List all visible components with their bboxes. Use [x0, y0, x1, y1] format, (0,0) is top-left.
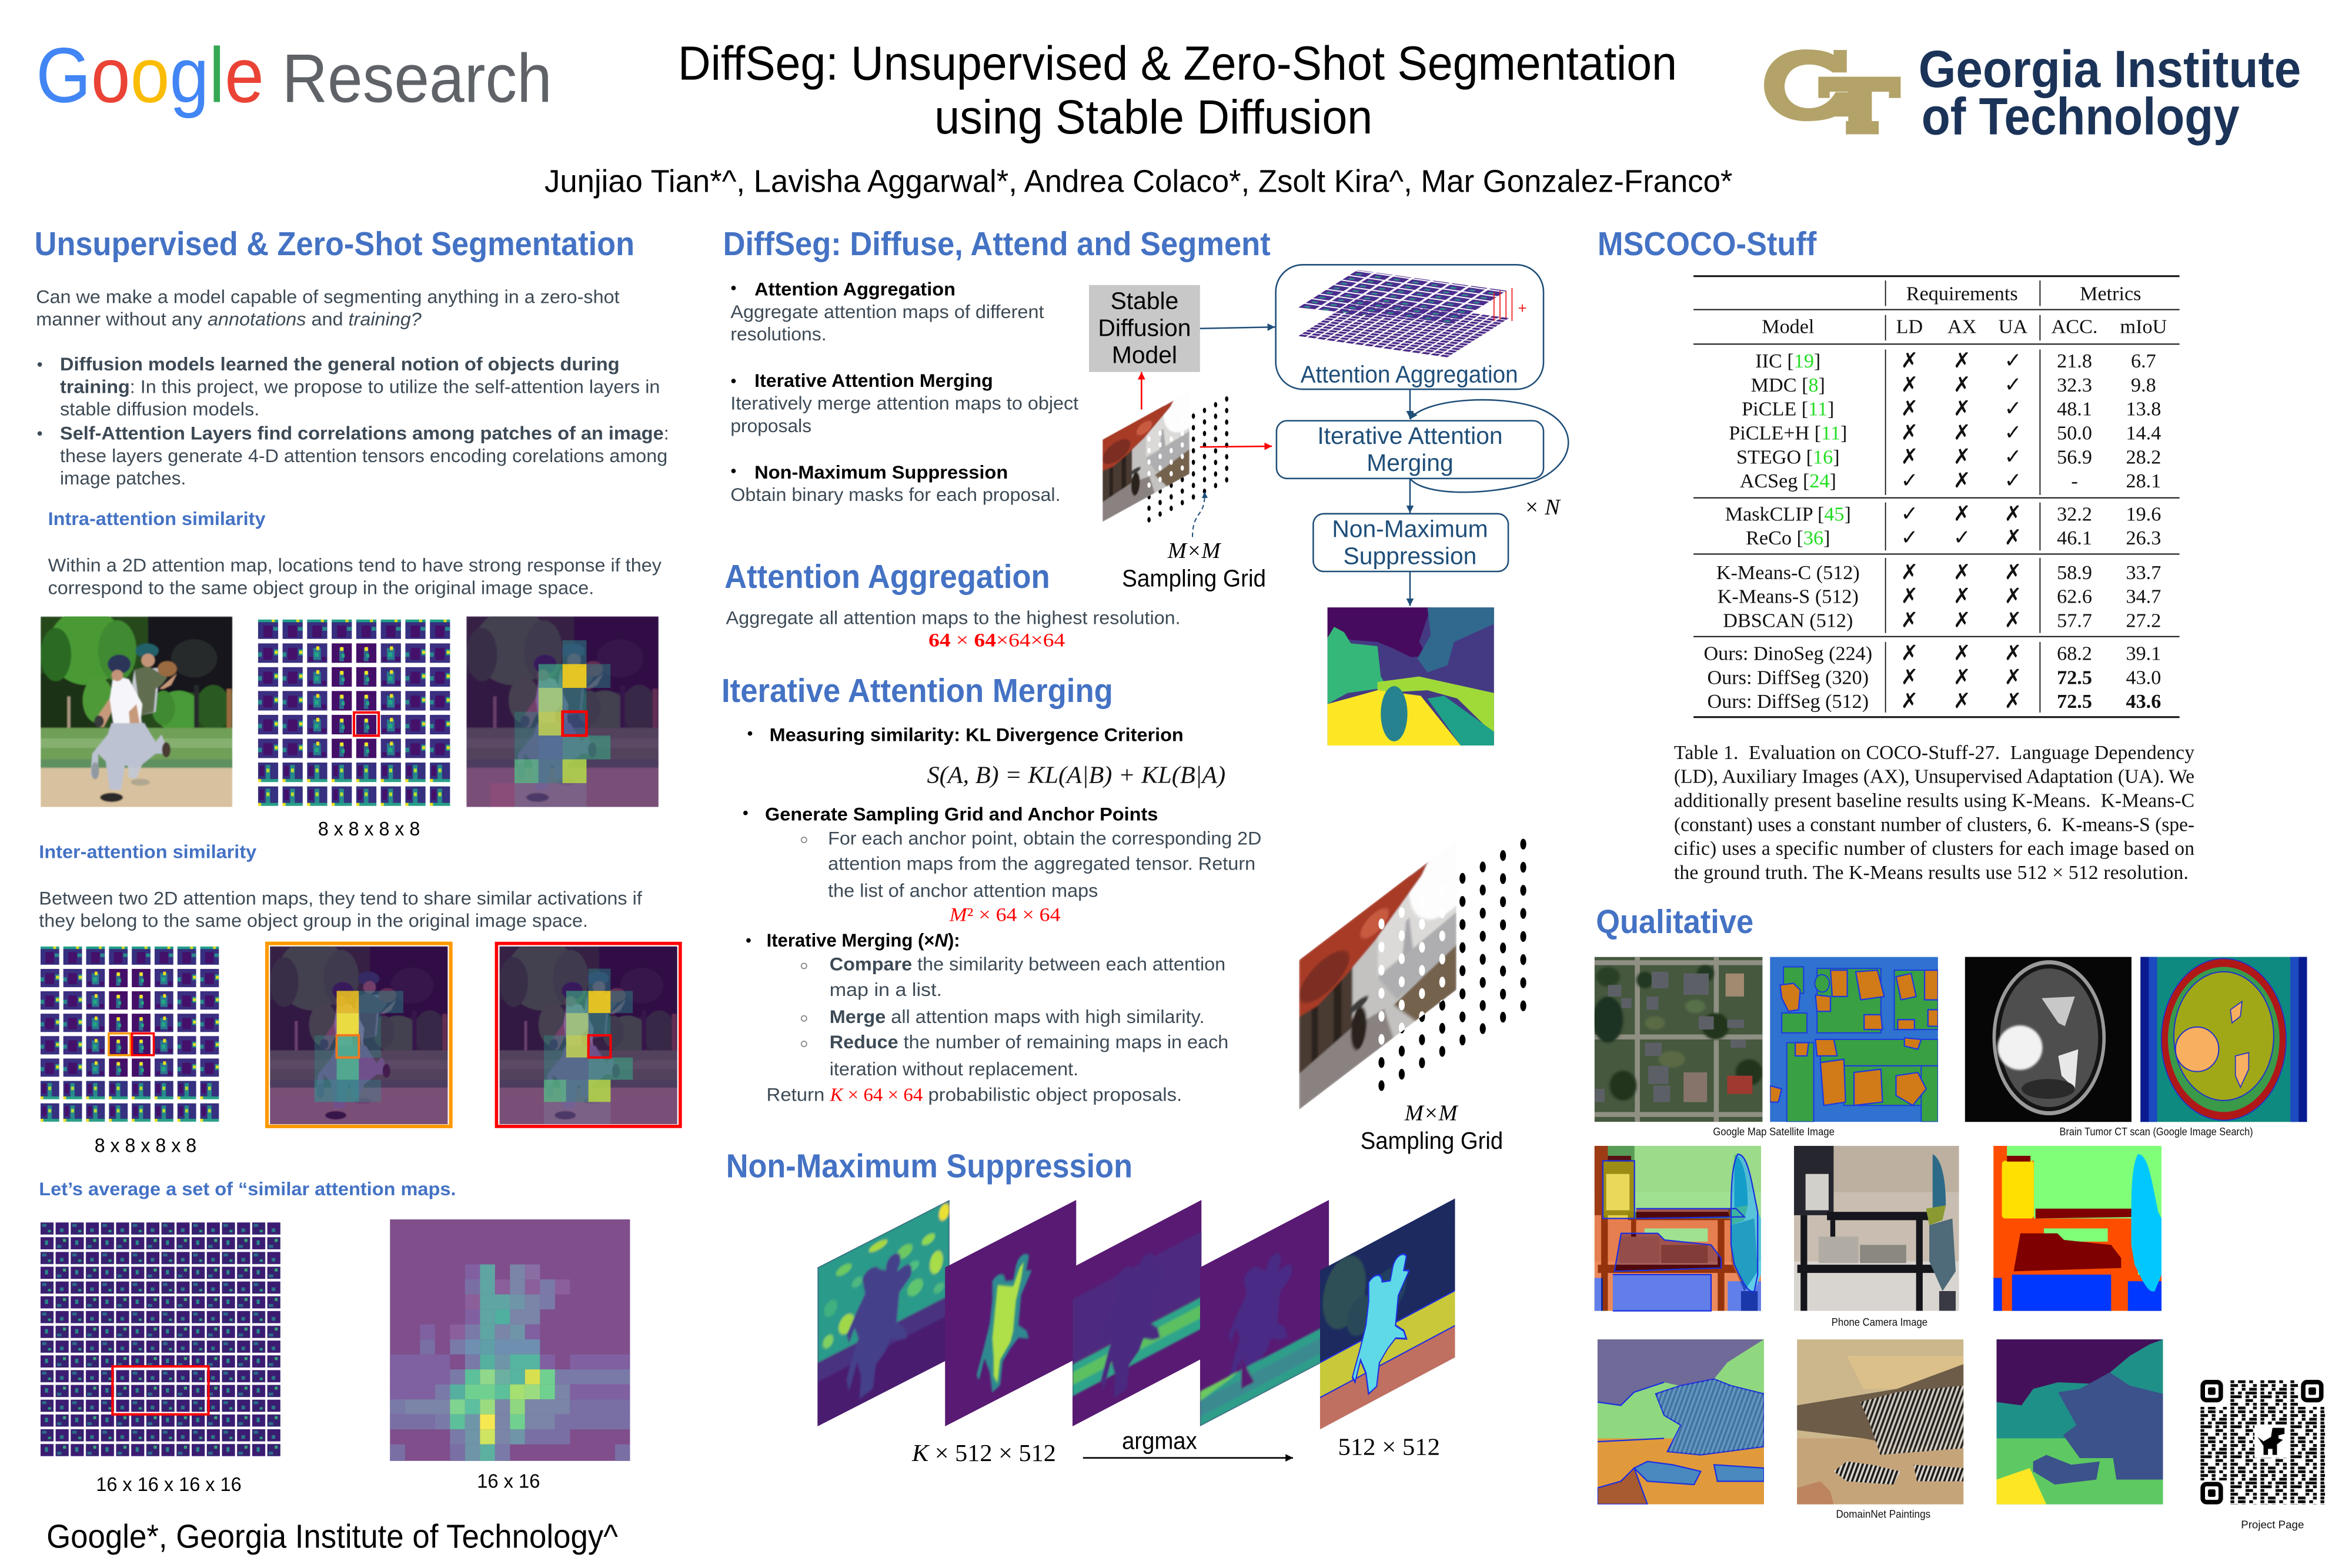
zebra segmentation flat: [1996, 1339, 2163, 1505]
results table: MDC [8]: [1751, 375, 1825, 396]
overview bullets: resolutions.: [730, 323, 827, 345]
results table: 19.6: [2126, 503, 2161, 525]
overlay: orange frame: [267, 940, 451, 1126]
box: Stable Diffusion Model: Stable: [1111, 287, 1178, 315]
results table: 28.2: [2126, 446, 2161, 468]
intra text: correspond to the same object group in the original image space.: [48, 577, 594, 598]
results table: ✗: [1953, 608, 1971, 632]
box: Attention Aggregation: +: [1518, 300, 1527, 317]
merging details: Measuring similarity: KL Divergence Criterion: [770, 724, 1184, 745]
results table: 68.2: [2057, 643, 2092, 665]
results table: 32.2: [2057, 503, 2092, 525]
overview bullets: proposals: [730, 415, 811, 436]
logo: Georgia Tech: [1764, 39, 2301, 145]
intro text: [36, 286, 620, 330]
results table: ✗: [2004, 526, 2022, 550]
arrow: aggregation to merging: [1409, 390, 1411, 419]
panel: left column: [35, 225, 680, 1555]
heading: Unsupervised & Zero-Shot Segmentation: Unsupervised & Zero-Shot Segmentation: [35, 225, 634, 262]
proposal map 4: [1200, 1200, 1329, 1426]
label: 8x8x8x8: 8 x 8 x 8 x 8: [318, 818, 420, 840]
table caption: the ground truth. The K-Means results use 512 × 512 resolution.: [1674, 862, 2189, 884]
results table: 9.8: [2131, 375, 2156, 396]
overview bullets: [730, 279, 1078, 505]
bullet list: [38, 353, 669, 489]
logo: Georgia Tech: Georgia Institute: [1919, 39, 2301, 98]
results table: ✓: [1900, 502, 1918, 526]
results table: Metrics: [2080, 283, 2141, 305]
results table: K-Means-C (512): [1716, 562, 1860, 584]
results table: 26.3: [2126, 527, 2161, 549]
results table: 14.4: [2126, 423, 2161, 444]
results table: 39.1: [2126, 643, 2161, 665]
merging details: Merge all attention maps with high similarity.: [830, 1006, 1204, 1027]
large sampling grid on image: [1299, 838, 1526, 1110]
results table: ✓: [1900, 526, 1918, 550]
box: Attention Aggregation: [1276, 265, 1544, 389]
logo: Google Research: [36, 32, 552, 119]
results table: 72.5: [2057, 691, 2092, 713]
label: 16x16x16x16: 16 x 16 x 16 x 16: [96, 1474, 242, 1496]
brain scan: [1965, 957, 2132, 1122]
flow diagram: [1089, 265, 1568, 745]
averaged heatmap 16x16: [390, 1219, 630, 1461]
heading: Iterative Attention Merging: Iterative Attention Merging: [721, 672, 1113, 709]
attention grid 16x16: [41, 1222, 282, 1458]
box: Iterative Attention Merging: [1277, 421, 1544, 479]
label: times N: × N: [1524, 495, 1561, 520]
results table: 56.9: [2057, 446, 2092, 468]
box: Iterative Attention Merging: Merging: [1367, 449, 1454, 476]
results table: ACC.: [2052, 316, 2097, 337]
results table: STEGO [16]: [1736, 446, 1840, 468]
heading: DiffSeg: DiffSeg: Diffuse, Attend and Segment: [723, 225, 1271, 262]
label: 512×512: 512 × 512: [1338, 1434, 1440, 1460]
results table: mIoU: [2120, 316, 2167, 337]
results table: 57.7: [2057, 610, 2092, 631]
overview bullets: Obtain binary masks for each proposal.: [730, 484, 1061, 505]
results table: 46.1: [2057, 527, 2092, 549]
results table: Requirements: [1906, 283, 2018, 305]
results table: ✓: [2004, 421, 2022, 445]
results table: ✓: [1900, 469, 1918, 493]
results table: 62.6: [2057, 586, 2092, 608]
arrow: grid to merging: [1200, 446, 1272, 447]
results table: ✗: [1900, 397, 1918, 421]
heading: Attention Aggregation: Attention Aggregation: [724, 558, 1050, 595]
results table: ✗: [1900, 421, 1918, 445]
results table: ✗: [1953, 641, 1971, 666]
results table: 58.9: [2057, 562, 2092, 584]
arrow: dashed pointer: [1192, 492, 1205, 537]
label: large M×M sampling grid: Sampling Grid: [1361, 1127, 1503, 1154]
overview bullets: Aggregate attention maps of different: [730, 301, 1044, 322]
results table: ✗: [1900, 689, 1918, 713]
results table: K-Means-S (512): [1718, 586, 1859, 608]
results table: Model: [1762, 316, 1814, 337]
results table: 72.5: [2057, 667, 2092, 688]
panel: right column: [1593, 225, 2328, 1531]
box: Non-Maximum Suppression: Suppression: [1344, 542, 1476, 569]
inter text: [39, 887, 642, 931]
bullet list: these layers generate 4-D attention tensors encoding corelations among: [60, 445, 667, 466]
label: 8x8x8x8 second: 8 x 8 x 8 x 8: [95, 1135, 196, 1156]
brain segmentation: [2140, 957, 2307, 1122]
results table: 34.7: [2126, 586, 2161, 608]
results table: ✗: [1953, 665, 1971, 689]
results table: 21.8: [2057, 350, 2092, 372]
inter text: Between two 2D attention maps, they tend to share similar activations if: [39, 887, 642, 908]
arrow: NMS to segmentation: [1409, 571, 1411, 606]
results table: ✓: [2004, 469, 2022, 493]
overview bullets: Iteratively merge attention maps to object: [730, 393, 1078, 414]
results table: ✗: [1953, 421, 1971, 445]
label: argmax: argmax: [1122, 1427, 1197, 1454]
results table: ✗: [2004, 665, 2022, 689]
title: [678, 36, 1677, 144]
bullet list: image patches.: [60, 467, 186, 489]
results table: ✗: [2004, 641, 2022, 666]
results table: ✗: [1953, 469, 1971, 493]
results table: ✓: [2004, 373, 2022, 397]
intra text: [48, 554, 662, 598]
merging details: Compare the similarity between each attention: [830, 954, 1225, 975]
results table: 43.6: [2126, 691, 2161, 713]
merging details: [743, 724, 1261, 1105]
aggregation text: 64 × 64 ×64×64: [928, 630, 1065, 651]
label: small M×M sampling grid: [1122, 539, 1266, 592]
overlay: intra attention: [466, 609, 659, 808]
proposal map 3: [1073, 1200, 1201, 1426]
table caption: [1674, 742, 2194, 884]
results table: ✗: [1900, 641, 1918, 666]
results table: UA: [1999, 316, 2027, 337]
box: Non-Maximum Suppression: Non-Maximum: [1332, 515, 1488, 542]
label: large M×M sampling grid: M×M: [1404, 1101, 1459, 1126]
merging details: M² × 64 × 64: [949, 904, 1061, 925]
table caption: Table 1. Evaluation on COCO-Stuff-27. Language Dependency: [1674, 742, 2194, 764]
merging details: attention maps from the aggregated tensor. Return: [828, 853, 1255, 874]
box: Non-Maximum Suppression: [1313, 514, 1508, 571]
box: Stable Diffusion Model: Diffusion: [1098, 315, 1191, 342]
results table: ✗: [1953, 584, 1971, 609]
results table: ✗: [1953, 349, 1971, 373]
label: K×512×512: K × 512 × 512: [911, 1440, 1056, 1466]
results table: PiCLE+H [11]: [1729, 423, 1847, 444]
merging details: Return K × 64 × 64 probabilistic object proposals.: [767, 1084, 1182, 1105]
affiliations: Google*, Georgia Institute of Technology^: [46, 1518, 619, 1555]
results table: Ours: DiffSeg (512): [1708, 691, 1869, 713]
intro text: manner without any annotations and training?: [36, 309, 422, 330]
proposal map 2: [945, 1200, 1076, 1426]
results table: ✗: [1953, 397, 1971, 421]
results table: AX: [1947, 316, 1977, 337]
authors: Junjiao Tian*^, Lavisha Aggarwal*, Andrea Colaco*, Zsolt Kira^, Mar Gonzalez-Franco*: [544, 165, 1732, 199]
title: DiffSeg: Unsupervised & Zero-Shot Segmentation: [678, 36, 1677, 90]
results table: ✗: [1953, 689, 1971, 713]
panel: middle column: [721, 225, 1568, 1466]
merging details: map in a list.: [830, 979, 942, 1000]
arrow: merge loop: [1410, 400, 1568, 492]
results table: Ours: DiffSeg (320): [1708, 667, 1869, 688]
intra text: Within a 2D attention map, locations tend to have strong response if they: [48, 554, 662, 576]
photo: baseball players: [41, 609, 232, 808]
overview bullets: Attention Aggregation: [754, 279, 956, 300]
results table: MaskCLIP [45]: [1725, 503, 1851, 525]
merging details: For each anchor point, obtain the corresponding 2D: [828, 827, 1261, 848]
table caption: additionally present baseline results using K-Means. K-Means-C: [1674, 790, 2194, 812]
results table: PiCLE [11]: [1742, 399, 1834, 420]
results table: 32.3: [2057, 375, 2092, 396]
table caption: (constant) uses a constant number of clusters, 6. K-means-S (spe-: [1674, 814, 2194, 835]
chair segmentation overlay: [1595, 1146, 1761, 1311]
results table: ✗: [1953, 502, 1971, 526]
box: Attention Aggregation: Attention Aggregation: [1301, 361, 1518, 388]
logo: Google Research: Google: [36, 32, 264, 119]
logo: Georgia Tech: of Technology: [1922, 86, 2240, 145]
merging details: S(A, B) = KL(A|B) + KL(B|A): [927, 762, 1225, 788]
merging details: Iterative Merging (×N):: [767, 930, 960, 951]
bullet list: Diffusion models learned the general notion of objects during: [60, 353, 620, 375]
aggregation text: [726, 607, 1181, 651]
results table: ✗: [2004, 560, 2022, 584]
chair segmentation flat: [1993, 1146, 2161, 1311]
arrow: merging to NMS: [1409, 479, 1411, 513]
aggregation text: Aggregate all attention maps to the highest resolution.: [726, 607, 1181, 628]
satellite image: [1593, 957, 1762, 1122]
results table: 50.0: [2057, 423, 2092, 444]
results table: ✗: [1953, 560, 1971, 584]
results table: ✗: [1953, 444, 1971, 469]
overview bullets: Iterative Attention Merging: [754, 370, 993, 391]
label: brain: Brain Tumor CT scan (Google Image Search): [2060, 1125, 2253, 1138]
results table: ✗: [2004, 608, 2022, 632]
box: Stable Diffusion Model: Model: [1112, 341, 1177, 368]
results table: ✗: [1900, 665, 1918, 689]
merging details: the list of anchor attention maps: [828, 880, 1098, 901]
results table: IIC [19]: [1755, 350, 1820, 372]
inter text: they belong to the same object group in the original image space.: [39, 910, 588, 931]
label: domainnet: DomainNet Paintings: [1836, 1508, 1930, 1520]
results table: 28.1: [2126, 470, 2161, 492]
results table: ✗: [1900, 349, 1918, 373]
results table: ✓: [2004, 397, 2022, 421]
results table: ✗: [2004, 689, 2022, 713]
bullet list: training: In this project, we propose to utilize the self-attention layers in: [60, 376, 660, 397]
results table: [1693, 275, 2180, 718]
segmentation overlay result: [1320, 1198, 1455, 1429]
arrow: model to aggregation: [1200, 327, 1275, 329]
results table: DBSCAN (512): [1723, 610, 1853, 631]
table caption: cific) uses a specific number of clusters for each image based on: [1674, 838, 2194, 860]
label: large M×M sampling grid: [1361, 1101, 1503, 1154]
label: project page: Project Page: [2241, 1519, 2304, 1531]
results table: Ours: DinoSeg (224): [1703, 643, 1872, 665]
zebra painting: [1797, 1339, 1963, 1505]
arrow: argmax: [1083, 1457, 1293, 1459]
arrow: image to model: [1141, 372, 1142, 410]
segmentation output: [1328, 607, 1494, 745]
results table: ✓: [2004, 444, 2022, 469]
label: satellite: Google Map Satellite Image: [1713, 1125, 1835, 1138]
results table: ✗: [2004, 584, 2022, 609]
attention grid 8x8: [258, 620, 450, 806]
overlay: red frame: [496, 940, 680, 1126]
results table: ✗: [1900, 584, 1918, 609]
bullet list: stable diffusion models.: [60, 399, 259, 420]
results table: 33.7: [2126, 562, 2161, 584]
results table: 27.2: [2126, 610, 2161, 631]
subheading: Intra-attention similarity: Intra-attention similarity: [48, 508, 266, 529]
label: 16x16: 16 x 16: [477, 1471, 540, 1493]
zebra segmentation overlay: [1598, 1339, 1764, 1505]
results table: 43.0: [2126, 667, 2161, 688]
subheading: Inter-attention similarity: Inter-attention similarity: [39, 841, 257, 862]
intro text: Can we make a model capable of segmenting anything in a zero-shot: [36, 286, 620, 307]
QR code: [2197, 1377, 2328, 1507]
results table: ✗: [1900, 608, 1918, 632]
merging details: Reduce the number of remaining maps in each: [830, 1031, 1228, 1052]
attention grid 8x8 second: [41, 947, 219, 1122]
results table: LD: [1896, 316, 1923, 337]
results table: ✗: [1953, 373, 1971, 397]
results table: ✗: [1900, 444, 1918, 469]
label: small M×M sampling grid: Sampling Grid: [1122, 565, 1266, 592]
table caption: (LD), Auxiliary Images (AX), Unsupervised Adaptation (UA). We: [1674, 766, 2194, 788]
heading: MSCOCO-Stuff: MSCOCO-Stuff: [1598, 225, 1817, 262]
logo: Google Research: Research: [282, 40, 552, 117]
merging details: iteration without replacement.: [830, 1058, 1078, 1079]
results table: -: [2071, 470, 2078, 492]
box: Stable Diffusion Model: [1089, 285, 1200, 372]
satellite segmentation: [1770, 957, 1938, 1122]
label: phone camera: Phone Camera Image: [1832, 1316, 1927, 1328]
results table: 13.8: [2126, 399, 2161, 420]
merging details: Generate Sampling Grid and Anchor Points: [765, 803, 1158, 824]
subheading: average: Let’s average a set of “similar attention maps.: [39, 1178, 456, 1199]
box: Iterative Attention Merging: Iterative Attention: [1317, 422, 1503, 449]
heading: Non-Maximum Suppression: Non-Maximum Suppression: [726, 1148, 1132, 1185]
chair photo: [1794, 1146, 1959, 1311]
results table: ✓: [2004, 349, 2022, 373]
results table: 6.7: [2131, 350, 2156, 372]
results table: 48.1: [2057, 399, 2092, 420]
results table: ✗: [1900, 373, 1918, 397]
label: small M×M sampling grid: M×M: [1167, 539, 1222, 563]
results table: ACSeg [24]: [1740, 470, 1836, 492]
results table: ✗: [2004, 502, 2022, 526]
bullet list: Self-Attention Layers find correlations among patches of an image :: [60, 423, 669, 444]
small sampling grid on image: [1102, 396, 1228, 523]
results table: ✗: [1900, 560, 1918, 584]
proposal map 1: [817, 1200, 950, 1426]
heading: Qualitative: Qualitative: [1596, 903, 1753, 940]
results table: ✓: [1953, 526, 1971, 550]
results table: ReCo [36]: [1746, 527, 1830, 549]
title: using Stable Diffusion: [934, 91, 1372, 144]
overview bullets: Non-Maximum Suppression: [754, 462, 1008, 483]
